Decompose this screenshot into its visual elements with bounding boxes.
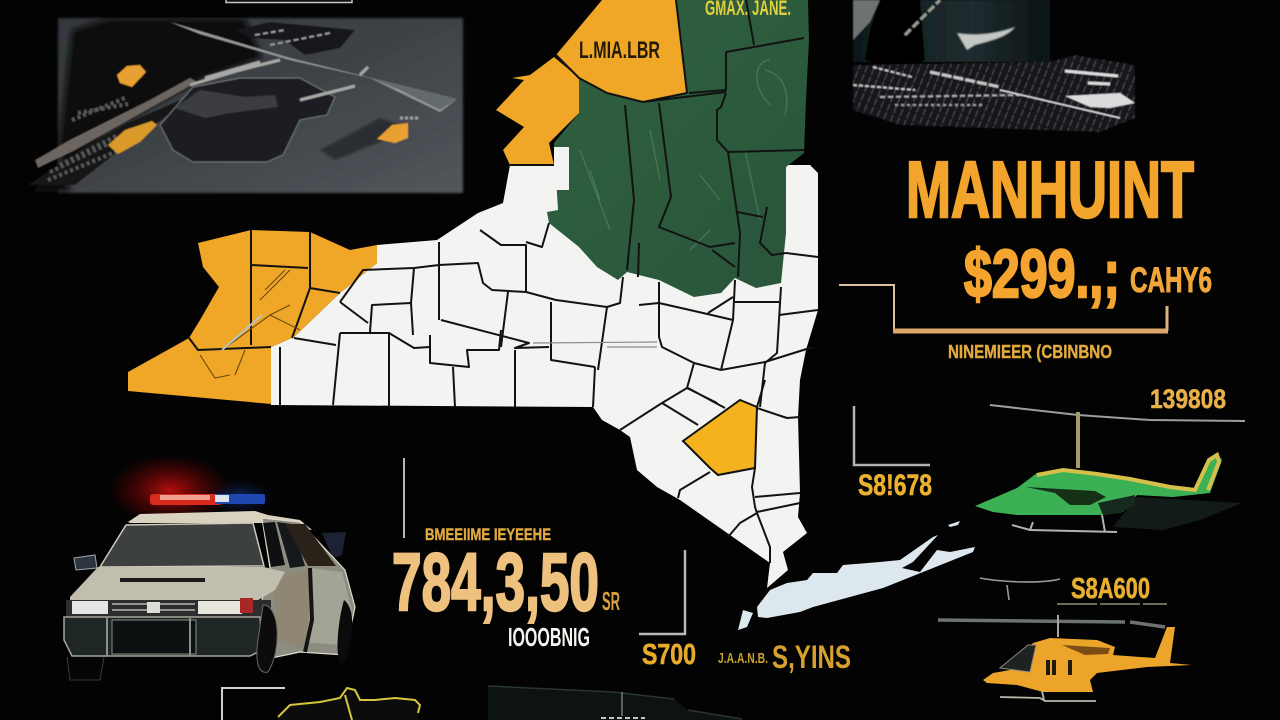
bumper — [64, 617, 262, 656]
Long Island — [757, 535, 975, 618]
helicopter cost value: S8!678 — [858, 469, 932, 502]
scratches on western counties — [200, 270, 300, 378]
big figure: 784,3,50 — [392, 537, 599, 628]
orange marker: upper — [117, 65, 146, 87]
near mirror — [74, 555, 97, 570]
debris speckle — [48, 98, 128, 180]
dark wedge in photo — [28, 18, 262, 192]
light glow — [108, 454, 232, 526]
side body — [262, 518, 355, 660]
small island — [948, 521, 960, 527]
shadow under tail — [1113, 497, 1242, 530]
under shadow — [67, 657, 104, 680]
figure caption: IOOOBNIG — [508, 622, 590, 652]
orange lake shore county — [496, 57, 579, 165]
vertical divider above figure — [403, 458, 405, 538]
Staten Island — [738, 610, 753, 630]
map: New York State — [128, 0, 975, 630]
dark water band — [853, 55, 1135, 132]
light streaks — [853, 67, 1120, 118]
cost caption: NINEMIEER (CBINBNO — [948, 342, 1112, 362]
glowing white shape — [957, 27, 1015, 50]
bracket: helicopter cost — [854, 406, 930, 465]
fuselage — [983, 627, 1192, 692]
main cost figure: $299.,; — [964, 236, 1120, 312]
photo panel: night landscape — [853, 0, 1135, 132]
map label: northern county: L.MIA.LBR — [579, 37, 660, 64]
mast — [1057, 615, 1059, 637]
orange southern county — [683, 400, 757, 475]
white sliver beside green — [554, 147, 569, 190]
boom arm — [35, 78, 197, 168]
orange northern county — [556, 0, 687, 102]
green helicopter value: 139808 — [1150, 384, 1226, 414]
rotor blade — [170, 22, 457, 112]
engine shadow — [1098, 495, 1135, 515]
headlights and grille — [66, 600, 271, 617]
water hatch texture — [853, 55, 1135, 132]
helicopter cockpit — [175, 90, 278, 118]
map base: white counties — [271, 165, 818, 588]
cabin windows — [1048, 660, 1070, 675]
door panels — [272, 568, 352, 645]
bracket: small cost — [639, 550, 685, 634]
distant ground streaks — [28, 100, 180, 185]
windows — [1026, 487, 1106, 505]
cockpit window — [1000, 645, 1036, 672]
cost unit: CAHY6 — [1130, 261, 1212, 300]
light bar — [150, 494, 222, 505]
small label text: J.A.A.N.B. — [718, 650, 768, 667]
bottom yellow outlined shape — [278, 688, 420, 720]
rotor hub — [190, 60, 368, 100]
bottom cropped dark panel — [488, 686, 742, 720]
bottom left corner bracket — [222, 688, 285, 720]
orange helicopter icon — [938, 615, 1192, 701]
green terrain texture — [580, 60, 787, 250]
small cost value: S700 — [642, 639, 696, 671]
orange helicopter value — [980, 573, 1167, 605]
value text: S8A600 — [1071, 573, 1150, 605]
orange marker: right — [377, 123, 408, 143]
yellow stripe — [1037, 455, 1219, 490]
orange marker: middle — [108, 121, 157, 154]
upper wreckage — [235, 22, 355, 55]
green north region — [547, 0, 809, 297]
skids — [1012, 515, 1117, 532]
hood — [70, 567, 285, 602]
helicopter body — [160, 78, 335, 162]
mast — [1076, 412, 1080, 468]
fuselage — [975, 453, 1222, 515]
small frame at top edge — [226, 0, 352, 2]
roof — [128, 511, 312, 530]
windshield — [100, 523, 264, 567]
dark smudge — [320, 118, 400, 160]
bottom label: S,YINS — [772, 639, 851, 675]
police car icon — [64, 454, 355, 680]
dark branch — [865, 0, 925, 70]
side windows — [263, 522, 285, 567]
upper cowl shadow — [1062, 645, 1110, 655]
rotor — [990, 405, 1245, 421]
bracket under cost — [839, 285, 1168, 331]
county borders — [189, 0, 818, 563]
far mirror — [322, 532, 346, 558]
photo panel: helicopter aerial — [28, 18, 463, 193]
orange western counties — [128, 230, 377, 404]
figure suffix: SR — [602, 586, 620, 616]
skids — [1000, 691, 1096, 701]
stat label: BMEEIIME IEYEEHE — [425, 525, 551, 544]
green helicopter icon — [975, 405, 1245, 532]
grey rock corner — [853, 0, 880, 40]
rotor — [938, 620, 1165, 627]
rear wheel — [338, 600, 352, 665]
front wheel — [257, 605, 277, 672]
